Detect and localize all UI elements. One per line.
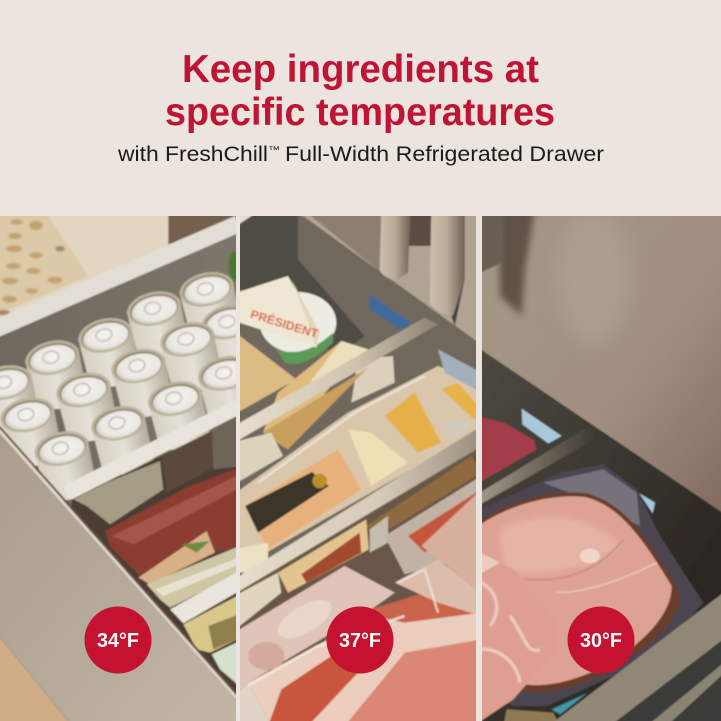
teal label bbox=[552, 693, 587, 714]
metal bar bbox=[482, 430, 588, 504]
ham bag bbox=[473, 464, 703, 706]
badge: 37°F: 37°F bbox=[339, 630, 381, 652]
lower cheese and tray bbox=[240, 451, 476, 664]
dark left wall bbox=[240, 216, 364, 350]
green bottle cap bbox=[228, 251, 236, 282]
drawer interior wall bbox=[240, 216, 476, 592]
badge: 34°F: 34°F bbox=[97, 630, 139, 652]
metal bar lower bbox=[231, 426, 481, 596]
title bbox=[165, 48, 555, 134]
badge: 34°F bbox=[84, 606, 152, 674]
panel: 37°F cheese and deli section bbox=[231, 209, 488, 721]
blue tape bbox=[370, 294, 411, 329]
bag highlight bbox=[543, 469, 640, 526]
floor bbox=[0, 637, 68, 721]
meat packages bbox=[231, 559, 481, 721]
subtitle bbox=[117, 143, 604, 166]
panel: 34°F beverage section bbox=[0, 216, 236, 721]
drawer back rail bbox=[0, 216, 243, 339]
front meat package bbox=[482, 553, 541, 721]
white divider lower bbox=[169, 572, 236, 624]
panel: 30°F meat section bbox=[473, 209, 721, 721]
cheese wedge President bbox=[231, 276, 321, 348]
parmesan wedge bbox=[231, 341, 395, 486]
door handles bbox=[380, 209, 465, 326]
badge: 37°F bbox=[326, 606, 394, 674]
bottom items bbox=[503, 709, 560, 721]
subtitle: with FreshChill bbox=[117, 143, 268, 166]
badge: 30°F bbox=[568, 606, 634, 674]
wrapped cheese group bbox=[231, 349, 481, 573]
title: specific temperatures bbox=[165, 91, 555, 134]
lower contents behind divider bbox=[71, 416, 236, 693]
white divider bbox=[72, 402, 236, 500]
drawer lower front bbox=[610, 634, 721, 721]
badge: 30°F: 30°F bbox=[580, 630, 622, 652]
subtitle: ™ bbox=[268, 145, 280, 156]
drawer interior bbox=[0, 233, 236, 510]
fridge door bbox=[302, 216, 476, 342]
handle end bbox=[482, 216, 502, 272]
ham slice bbox=[473, 492, 680, 692]
cheese wedge President: PRÉSIDENT bbox=[249, 306, 321, 341]
metal bar upper bbox=[231, 318, 438, 444]
red meat package bbox=[482, 416, 538, 482]
soft highlight on wall bbox=[563, 218, 626, 337]
drawer interior bbox=[473, 344, 721, 721]
drawer front panel bbox=[0, 420, 243, 721]
title: Keep ingredients at bbox=[182, 48, 539, 91]
subtitle: Full-Width Refrigerated Drawer bbox=[285, 143, 604, 166]
handle shadow bbox=[498, 209, 535, 316]
light blue tag lower bbox=[639, 493, 655, 513]
fridge lower wall bbox=[482, 216, 721, 512]
kitchen background bbox=[0, 216, 236, 318]
light blue tag bbox=[522, 409, 562, 443]
front handle bbox=[647, 658, 721, 721]
front drawer rail bbox=[548, 588, 721, 721]
cheese and brie group bbox=[231, 292, 336, 416]
cans bbox=[0, 271, 236, 501]
